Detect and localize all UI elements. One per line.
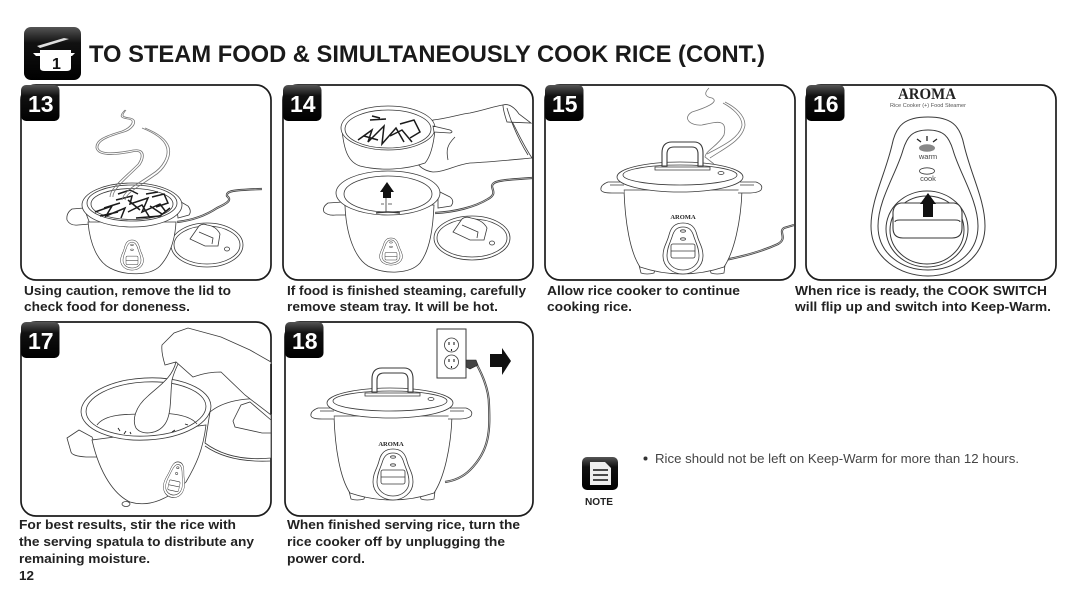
badge: 15 — [545, 85, 584, 121]
logo: Aroma: Rice Cooker (+) Food Steamer — [890, 103, 966, 109]
icon: step 18 illustration: AROMA — [378, 441, 404, 448]
icon: step 14 illustration — [324, 105, 532, 272]
icon: note — [582, 457, 618, 490]
badge: 17: 17 — [28, 328, 54, 354]
icon: step 15 illustration — [601, 88, 794, 274]
header icon: cooker badge: 1 — [52, 56, 61, 73]
icon: control panel: cook — [920, 174, 936, 183]
caption: step 16: When rice is ready, the COOK SWITCH — [795, 283, 1047, 298]
panel: step 15 — [545, 85, 795, 280]
page number: 12 — [19, 568, 34, 583]
note label: NOTE — [585, 497, 613, 508]
panel: step 17 — [21, 322, 271, 516]
arrow: unplug — [490, 348, 511, 375]
caption: step 16: will flip up and switch into Keep-Warm. — [794, 299, 1051, 314]
icon: step 15 illustration: AROMA — [670, 214, 696, 221]
caption: step 14: remove steam tray. It will be hot. — [287, 299, 498, 314]
caption: step 18: rice cooker off by unplugging the — [287, 534, 505, 549]
panel: step 14 — [283, 85, 533, 280]
panel: step 16 — [806, 85, 1056, 280]
panel: step 13 — [21, 85, 271, 280]
caption: step 14: If food is finished steaming, carefully — [287, 283, 527, 298]
caption: step 13: Using caution, remove the lid to — [24, 283, 231, 298]
logo: Aroma: AROMA — [898, 86, 956, 103]
note text: Rice should not be left on Keep-Warm for more than 12 hours. — [655, 452, 1019, 466]
caption: step 13: check food for doneness. — [24, 299, 190, 314]
badge: 15: 15 — [552, 91, 578, 117]
badge: 17 — [21, 322, 60, 358]
caption: step 17: the serving spatula to distribute any — [19, 534, 255, 549]
badge: 18 — [285, 322, 324, 358]
badge: 16: 16 — [813, 91, 839, 117]
caption: step 17: remaining moisture. — [19, 551, 150, 566]
badge: 18: 18 — [292, 328, 318, 354]
badge: 14 — [283, 85, 322, 121]
badge: 16 — [806, 85, 844, 121]
icon: step 13 illustration — [67, 110, 262, 274]
icon: step 17 illustration — [67, 328, 271, 506]
icon: step 18 illustration — [311, 329, 511, 500]
caption: step 15: cooking rice. — [547, 299, 632, 314]
header icon: cooker badge — [24, 27, 81, 80]
caption: step 18: When finished serving rice, turn the — [287, 517, 520, 532]
logo: Aroma — [890, 86, 966, 109]
badge: 13: 13 — [28, 91, 54, 117]
panel: step 18 — [285, 322, 533, 516]
arrow: switch up — [920, 193, 936, 217]
caption: step 17: For best results, stir the rice with — [19, 517, 236, 532]
icon: control panel: warm — [918, 152, 937, 161]
title: TO STEAM FOOD & SIMULTANEOUSLY COOK RICE (CONT.) — [89, 41, 765, 68]
caption: step 18: power cord. — [287, 551, 365, 566]
arrow: lift up — [380, 182, 394, 198]
icon: control panel — [871, 117, 985, 276]
badge: 13 — [21, 85, 60, 121]
caption: step 15: Allow rice cooker to continue — [547, 283, 740, 298]
badge: 14: 14 — [290, 91, 316, 117]
